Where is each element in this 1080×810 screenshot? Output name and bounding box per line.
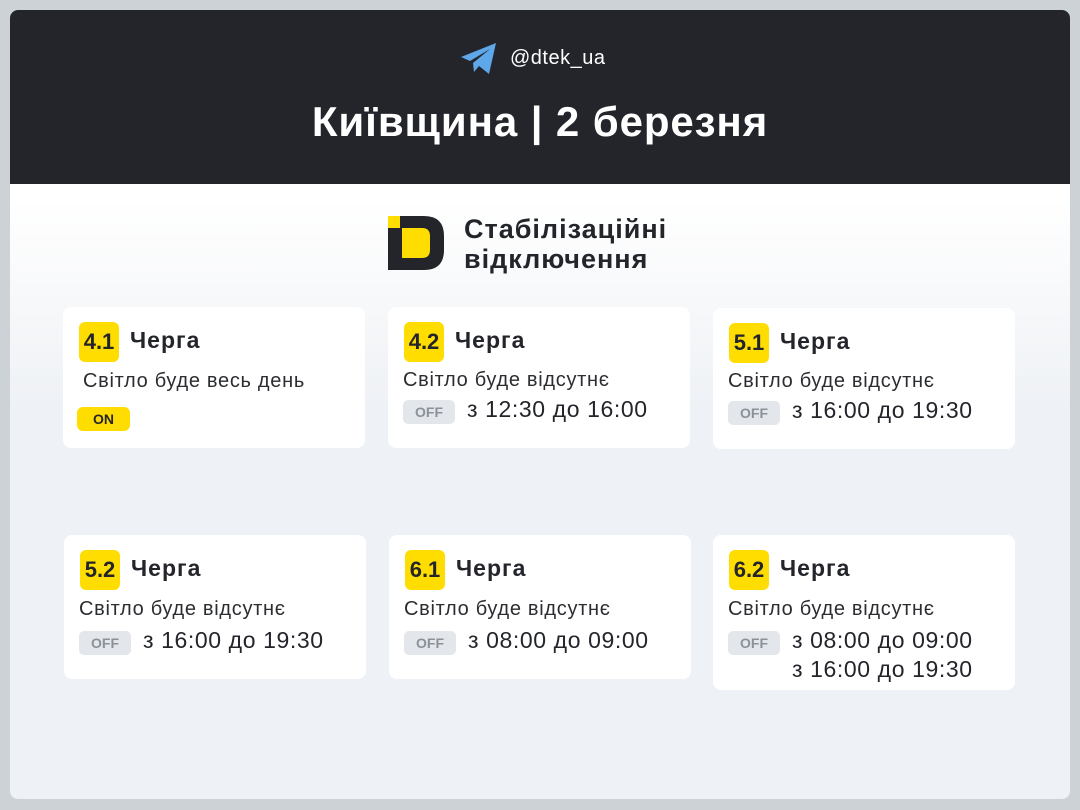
card: 5.2: OFF: [91, 635, 119, 651]
header: [10, 10, 1070, 184]
card: 5.1: Черга: [780, 328, 850, 354]
card: 4.2: Світло буде відсутнє: [403, 369, 610, 391]
card: 6.2: Світло буде відсутнє: [728, 598, 935, 620]
logo block: Стабілізаційні: [464, 214, 667, 244]
card: 6.1: OFF: [416, 635, 444, 651]
telegram handle: @dtek_ua: [510, 47, 605, 69]
card: 5.1: з 16:00 до 19:30: [792, 397, 973, 423]
card: 4.1: ON: [93, 411, 114, 427]
logo block: відключення: [464, 244, 648, 274]
card: 6.2: з 16:00 до 19:30: [792, 656, 973, 682]
card: 5.2: з 16:00 до 19:30: [143, 627, 324, 653]
card: 6.2: [713, 535, 1015, 690]
card: 4.1: Світло буде весь день: [83, 370, 305, 392]
card: 5.2: Світло буде відсутнє: [79, 598, 286, 620]
icon: telegram plane: [461, 43, 496, 74]
card: 5.2: [64, 535, 366, 679]
card: 4.1: Черга: [130, 327, 200, 353]
card: 4.2: OFF: [415, 404, 443, 420]
card: 6.1: Черга: [456, 555, 526, 581]
card: 6.2: 6.2: [734, 557, 764, 582]
card: 4.2: з 12:30 до 16:00: [467, 396, 648, 422]
icon: DTEK logo: [388, 216, 444, 270]
card: 4.2: Черга: [455, 327, 525, 353]
card: 5.1: OFF: [740, 405, 768, 421]
card: 4.1: [63, 307, 365, 448]
card: 4.2: 4.2: [409, 329, 439, 354]
card: 6.2: Черга: [780, 555, 850, 581]
card: 4.1: 4.1: [84, 329, 114, 354]
card: 5.2: Черга: [131, 555, 201, 581]
card: 4.2: [388, 307, 690, 448]
title: Київщина | 2 березня: [312, 98, 768, 145]
card: 5.1: [713, 308, 1015, 449]
logo block: [388, 214, 667, 274]
card: 5.2: 5.2: [85, 557, 115, 582]
card: 6.2: з 08:00 до 09:00: [792, 627, 973, 653]
card: 6.2: OFF: [740, 635, 768, 651]
card: 5.1: Світло буде відсутнє: [728, 370, 935, 392]
card: 6.1: 6.1: [410, 557, 440, 582]
card: 6.1: Світло буде відсутнє: [404, 598, 611, 620]
card: 5.1: 5.1: [734, 330, 764, 355]
telegram handle: [461, 43, 605, 74]
card: 6.1: з 08:00 до 09:00: [468, 627, 649, 653]
card: 6.1: [389, 535, 691, 679]
